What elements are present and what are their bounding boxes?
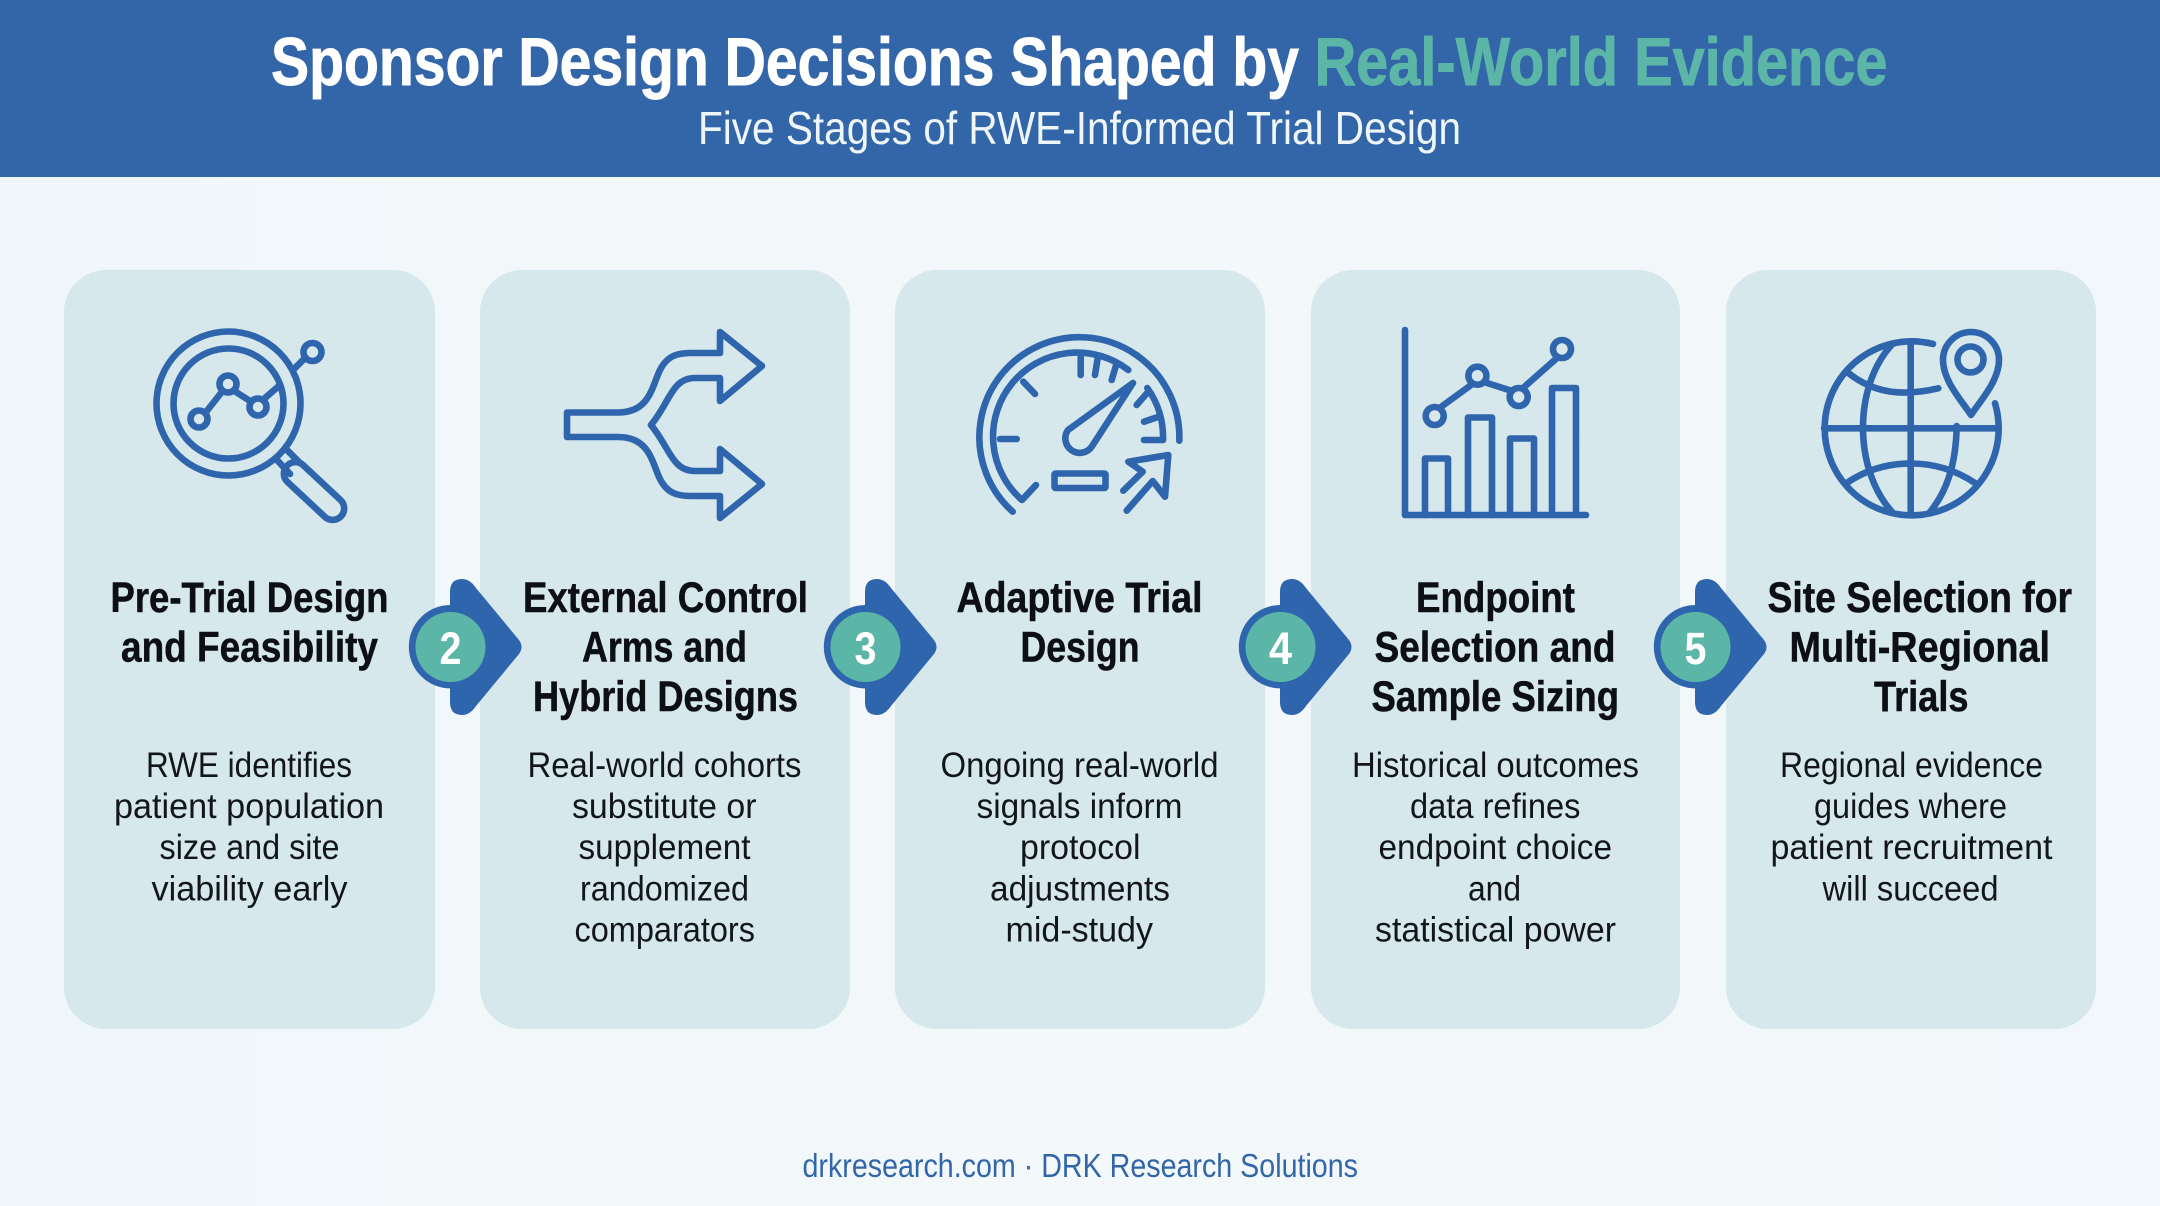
description: viability early [152,870,348,908]
subtitle: Five Stages of RWE-Informed Trial Design [698,102,1461,154]
heading: Arms and [582,624,747,672]
icon: speedometer with arrow [979,337,1179,512]
panel: stage 3 adaptive trial design [895,270,1265,1029]
description: Real-world cohorts [528,746,802,785]
heading: Selection and [1374,624,1616,672]
heading [1768,574,2072,721]
heading [110,574,388,672]
description: data refines [1410,787,1580,826]
arrow badge 4: 4 [1269,623,1292,674]
description: guides where [1814,787,2007,826]
heading: Endpoint [1416,574,1575,622]
arrow badge 4 [1239,579,1352,715]
description: adjustments [990,870,1170,908]
description [114,746,384,908]
panel: stage 5 site selection [1726,270,2096,1029]
heading: Multi-Regional [1790,624,2050,672]
arrow badge 3: 3 [854,623,876,674]
description [1352,746,1639,950]
description: protocol [1020,828,1140,867]
heading: and Feasibility [121,624,378,672]
header banner [0,0,2160,177]
heading: External Control [523,574,808,622]
heading [1372,574,1619,721]
description: substitute or [572,787,757,826]
description [1770,746,2053,908]
title: Real-World Evidence [1314,24,1888,100]
footer: drkresearch.com · DRK Research Solutions [802,1148,1358,1185]
description: and [1468,870,1521,908]
description: patient recruitment [1770,828,2053,867]
heading: Site Selection for [1768,574,2072,622]
arrow badge 5: 5 [1684,623,1706,674]
description: statistical power [1375,910,1616,950]
arrow badge 2: 2 [440,623,462,674]
description: Historical outcomes [1352,746,1639,785]
icon: magnifier with trend line [156,332,349,525]
arrow badge 2 [409,579,522,715]
description: size and site [160,828,340,867]
description: signals inform [976,787,1182,826]
description [940,746,1218,950]
icon: bar chart with trend line [1405,330,1586,515]
heading [523,574,808,721]
icon: globe with location pin [1824,332,1999,515]
description: Regional evidence [1780,746,2043,785]
heading: Hybrid Designs [533,673,798,721]
description [528,746,802,950]
description: mid-study [1006,910,1153,950]
description: Ongoing real-world [940,746,1218,785]
heading: Trials [1874,673,1968,721]
description: patient population [114,787,384,826]
title: Sponsor Design Decisions Shaped by [271,24,1299,100]
icon: splitting arrows [567,332,762,518]
description: randomized [580,870,749,908]
heading: Pre-Trial Design [110,574,388,622]
heading [956,574,1202,672]
heading: Design [1020,624,1140,672]
panel: stage 2 external control arms [480,270,850,1029]
panel: stage 4 endpoint selection [1311,270,1680,1029]
description: supplement [578,828,751,867]
arrow badge 3 [824,579,936,715]
panel: stage 1 pre-trial design [64,270,435,1029]
heading: Sample Sizing [1372,673,1619,721]
description: endpoint choice [1378,828,1612,867]
description: comparators [574,910,755,950]
description: will succeed [1822,870,1998,908]
description: RWE identifies [146,746,352,785]
heading: Adaptive Trial [956,574,1202,622]
arrow badge 5 [1654,579,1766,715]
